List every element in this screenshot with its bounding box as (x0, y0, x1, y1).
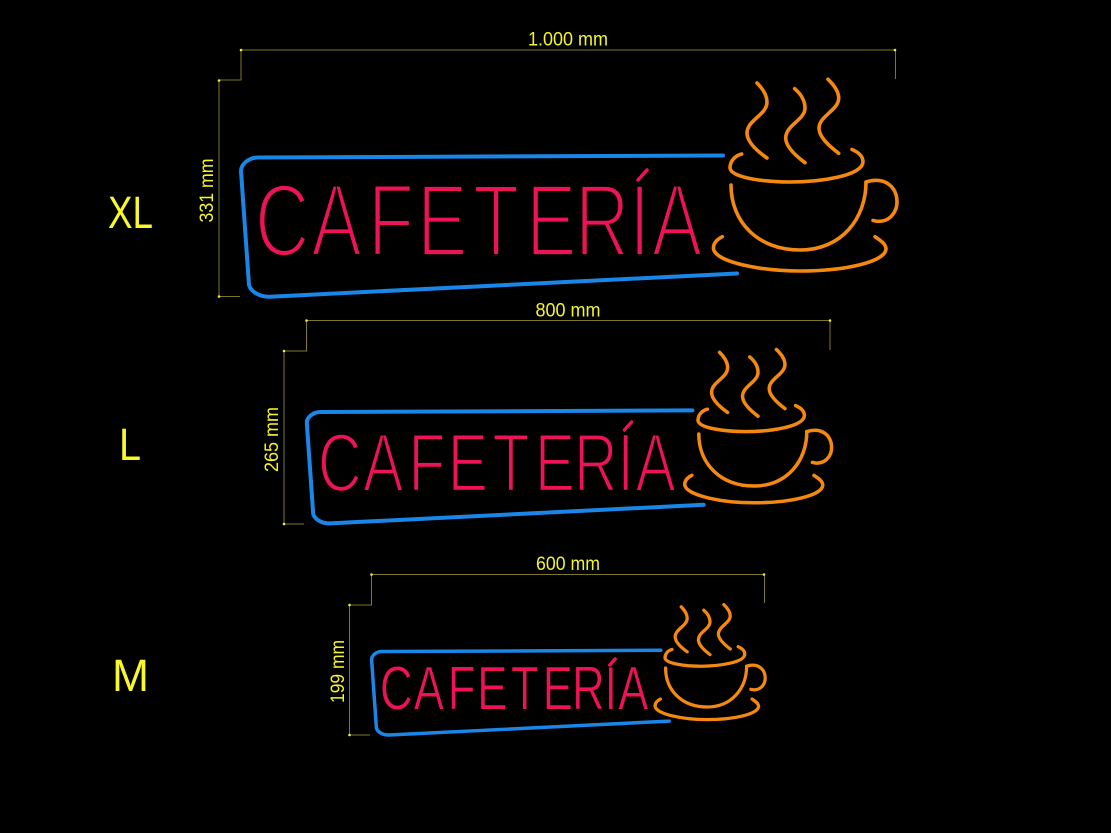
height label XL: 331 mm (196, 158, 218, 222)
width label L: 800 mm (536, 300, 600, 322)
coffee cup M (655, 605, 765, 720)
lettering M: CAFETERÍA (380, 655, 649, 723)
neon sign L (307, 349, 832, 523)
width label XL: 1.000 mm (528, 28, 608, 50)
width label M: 600 mm (536, 553, 600, 575)
coffee cup XL (713, 79, 897, 271)
dimensions M (327, 553, 765, 736)
lettering L: CAFETERÍA (318, 418, 676, 509)
size label XL: XL (108, 187, 153, 238)
blue frame M (372, 650, 669, 735)
blue frame XL (241, 156, 737, 297)
coffee cup L (685, 349, 832, 503)
height label L: 265 mm (261, 407, 283, 472)
size label L: L (119, 419, 141, 470)
size label M: M (112, 650, 149, 701)
neon sign XL (241, 79, 897, 297)
dimensions L (261, 300, 831, 525)
height label M: 199 mm (327, 640, 349, 703)
lettering XL: CAFETERÍA (255, 164, 703, 279)
dimensions XL (196, 28, 896, 298)
blue frame L (307, 410, 704, 523)
neon sign M (372, 605, 765, 735)
